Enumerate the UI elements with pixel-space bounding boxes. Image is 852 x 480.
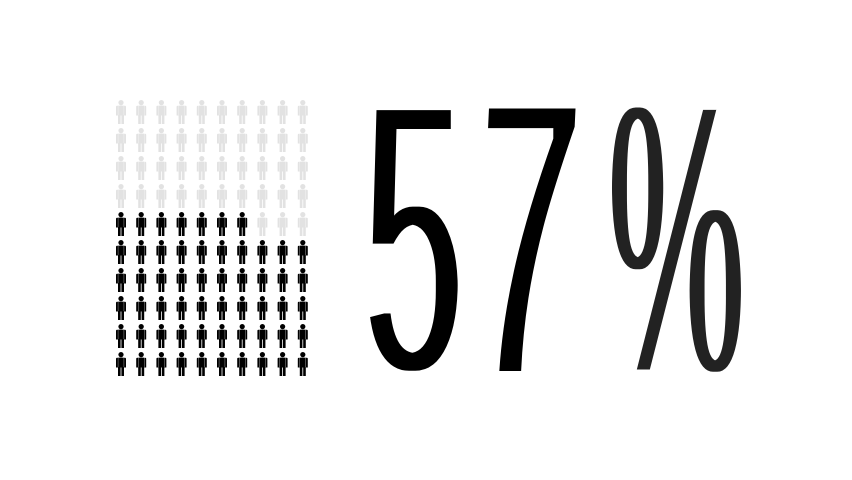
percent sign: % [608,21,744,459]
pictogram chart: 57 of 100 people [116,100,308,376]
grey people: remaining 43 [116,100,308,236]
big number: 57: 7 [466,19,586,461]
big number: 57: 5 [365,21,462,455]
big number: 57 [365,19,586,461]
black people: filled 57 [116,212,308,376]
